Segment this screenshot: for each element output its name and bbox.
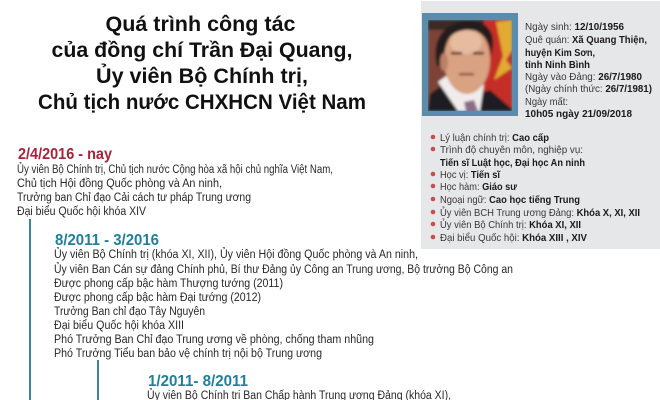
timeline entry: 2011 to 2016: Ủy viên Bộ Chính trị (khóa XI, XII), Ủy viên Hội đồng Quốc phòng và An ninh,: [54, 248, 418, 261]
personal details: (Ngày chính thức: 26/7/1981): [525, 83, 652, 95]
personal details: tỉnh Ninh Bình: [525, 59, 590, 71]
timeline connector 1: [29, 219, 31, 400]
timeline entry: 2011 to 2016: Phó Trưởng Tiểu ban bảo vệ chính trị nội bộ Trung ương: [54, 348, 322, 360]
qualifications list: Ngoại ngữ: Cao học tiếng Trung: [440, 194, 580, 206]
personal details: Quê quán: Xã Quang Thiện,: [525, 34, 647, 46]
personal details: Ngày mất:: [525, 96, 568, 108]
timeline entry: 2016 to present: [17, 146, 333, 218]
portrait photo: [422, 13, 518, 116]
qualifications list: Ủy viên BCH Trung ương Đảng: Khóa X, XI, XII: [440, 206, 640, 219]
timeline entry: 2011 to 2016: Đại biểu Quốc hội khóa XIII: [54, 320, 184, 332]
qualifications list: Trình độ chuyên môn, nghiệp vụ:: [440, 144, 583, 156]
title: [38, 13, 366, 114]
qualifications list: Tiến sĩ Luật học, Đại học An ninh: [440, 157, 585, 169]
personal details: 10h05 ngày 21/09/2018: [525, 108, 632, 120]
personal details: Ngày vào Đảng: 26/7/1980: [525, 71, 642, 83]
qualifications list: Ủy viên Bộ Chính trị: Khóa XI, XII: [440, 218, 581, 231]
title: Quá trình công tác: [106, 13, 296, 36]
qualifications list: Học hàm: Giáo sư: [440, 181, 517, 193]
timeline entry: 2011 to 2016: [54, 232, 513, 360]
title: Chủ tịch nước CHXHCN Việt Nam: [38, 91, 366, 114]
timeline connector 2: [97, 360, 99, 400]
timeline entry: 2011 to 2016: Ủy viên Ban Cán sự đảng Chính phủ, Bí thư Đảng ủy Công an Trung ương, Bộ trưởng Bộ Công an: [54, 263, 513, 276]
qualifications list: [431, 132, 640, 244]
title: Ủy viên Bộ Chính trị,: [96, 64, 308, 88]
timeline entry: 2011 to 2016: Được phong cấp bậc hàm Đại tướng (2012): [54, 292, 261, 304]
timeline entry: 2016 to present: Chủ tịch Hội đồng Quốc phòng và An ninh,: [17, 178, 222, 190]
timeline entry: 2011: [147, 373, 451, 400]
timeline entry: 2016 to present: Đại biểu Quốc hội khóa XIV: [17, 206, 146, 218]
personal details: [525, 21, 652, 120]
qualifications list: Học vị: Tiến sĩ: [440, 169, 501, 181]
timeline entry: 2011 to 2016: 8/2011 - 3/2016: [55, 232, 159, 249]
panel: profile: [421, 1, 660, 249]
personal details: Ngày sinh: 12/10/1956: [525, 21, 624, 33]
qualifications list: Lý luận chính trị: Cao cấp: [440, 132, 549, 144]
timeline entry: 2011 to 2016: Trưởng Ban chỉ đạo Tây Nguyên: [54, 306, 205, 318]
timeline entry: 2011 to 2016: Được phong cấp bậc hàm Thượng tướng (2011): [54, 278, 283, 290]
timeline entry: 2011: 1/2011- 8/2011: [148, 373, 248, 390]
timeline entry: 2011 to 2016: Phó Trưởng Ban Chỉ đạo Trung ương về phòng, chống tham nhũng: [54, 334, 374, 346]
timeline entry: 2016 to present: Ủy viên Bộ Chính trị, Chủ tịch nước Cộng hòa xã hội chủ nghĩa Việt Nam,: [17, 163, 333, 176]
qualifications list: Đại biểu Quốc hội: Khóa XIII , XIV: [440, 232, 587, 244]
timeline entry: 2016 to present: 2/4/2016 - nay: [18, 146, 112, 163]
title: của đồng chí Trần Đại Quang,: [52, 39, 352, 62]
timeline entry: 2016 to present: Trưởng ban Chỉ đạo Cải cách tư pháp Trung ương: [17, 192, 251, 204]
personal details: huyện Kim Sơn,: [525, 47, 595, 59]
